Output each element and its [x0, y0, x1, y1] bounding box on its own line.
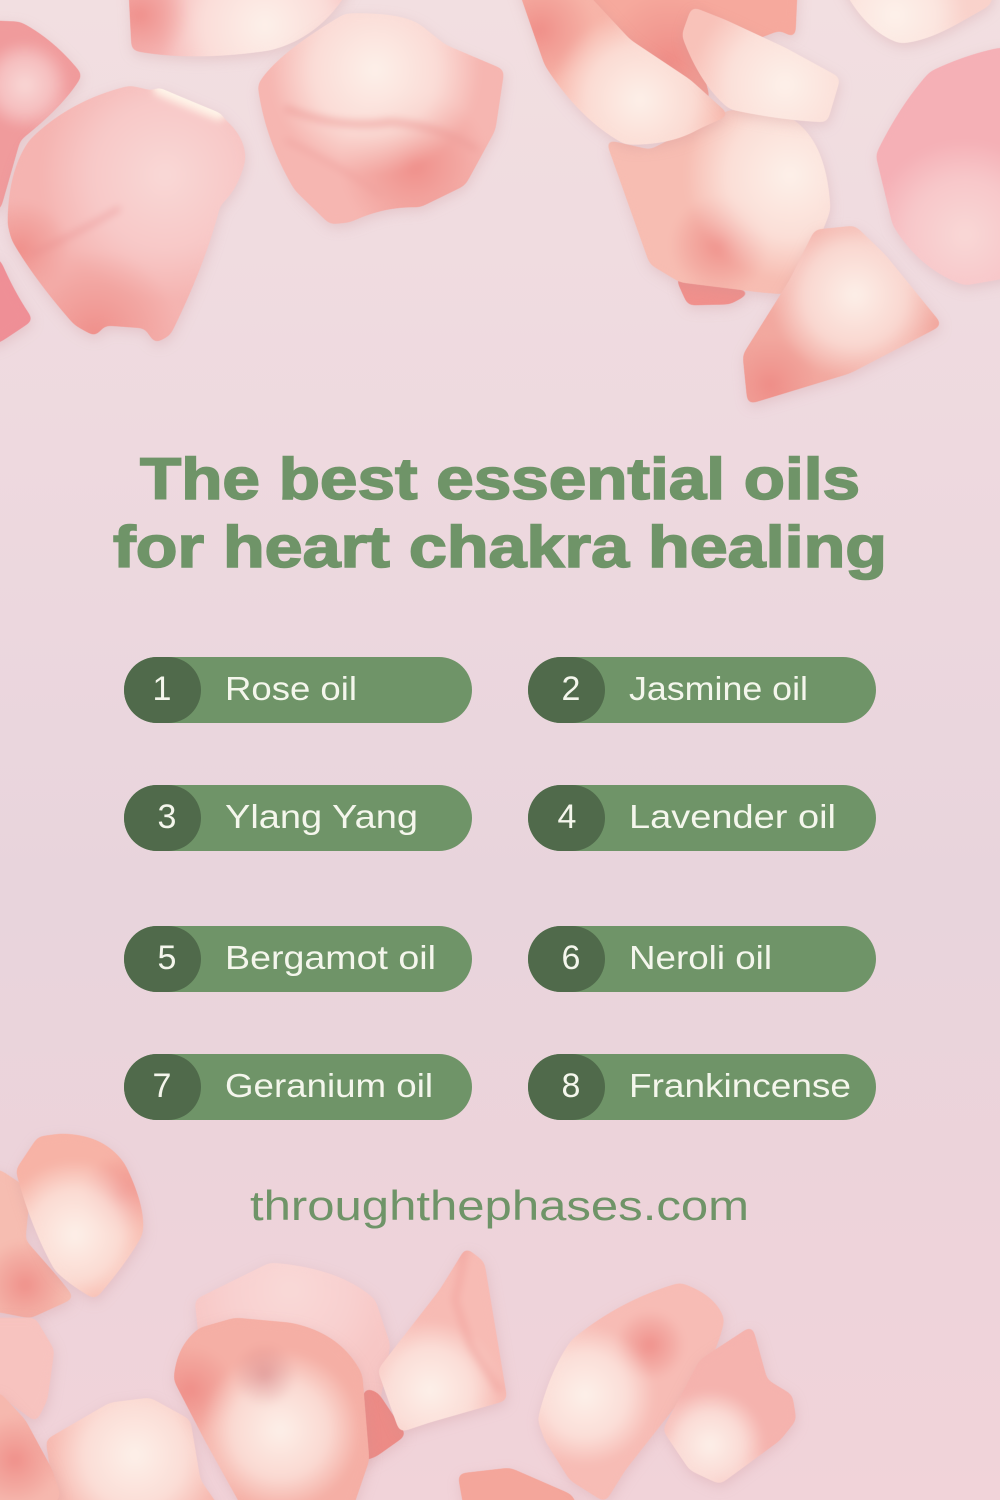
- list item 2: 2: [562, 670, 580, 708]
- petal: left lower salmon: [0, 1393, 60, 1500]
- petal: small under lip: [675, 276, 752, 305]
- petal: right pink: [876, 48, 1000, 285]
- petal: dark back fold: [350, 1388, 406, 1464]
- title: for heart chakra healing: [113, 515, 887, 580]
- list item 3: [124, 785, 472, 851]
- title: The best essential oils: [140, 447, 860, 512]
- bottom-centre petals: [174, 1248, 587, 1500]
- petal: far left lower: [0, 250, 33, 350]
- list item 6: 6: [562, 939, 580, 977]
- petal: pale back: [195, 1263, 390, 1460]
- petal: narrow right: [663, 1326, 796, 1484]
- petal: crumpled left: [0, 1170, 74, 1318]
- list item 4: [528, 785, 876, 851]
- petal: white lower: [46, 1398, 235, 1500]
- petal: main bowl: [174, 1318, 369, 1500]
- list item 7: [124, 1054, 472, 1120]
- petal: small bottom: [458, 1468, 587, 1500]
- list item 3: Ylang Yang: [225, 798, 418, 835]
- list item 1: 1: [153, 670, 171, 708]
- petal: top right cream: [835, 0, 1000, 43]
- bottom-right petals: [538, 1283, 796, 1500]
- petal: heart-shaped centre: [258, 14, 504, 224]
- title: [113, 447, 887, 580]
- list item 1: [124, 657, 472, 723]
- list item 4: Lavender oil: [629, 798, 836, 835]
- top-left petals: [0, 0, 504, 350]
- petal: folded triangle: [378, 1248, 507, 1432]
- petal: far left upper: [0, 20, 82, 210]
- list item 8: [528, 1054, 876, 1120]
- list item 8: 8: [562, 1067, 580, 1105]
- list item 6: [528, 926, 876, 992]
- list item 7: 7: [153, 1067, 171, 1105]
- list item 2: [528, 657, 876, 723]
- list item 5: 5: [158, 939, 176, 977]
- petal: cut wedge: [743, 226, 942, 404]
- list item 5: Bergamot oil: [225, 939, 436, 976]
- list item 7: Geranium oil: [225, 1067, 433, 1104]
- list item 3: 3: [158, 798, 176, 836]
- list item 4: 4: [558, 798, 576, 836]
- list item 2: Jasmine oil: [629, 670, 808, 707]
- footer website: throughthephases.com: [250, 1182, 749, 1229]
- list item 1: Rose oil: [225, 670, 357, 707]
- petal: top centre-left: [128, 0, 358, 56]
- bottom-left petals: [0, 1134, 235, 1500]
- petal: upper light: [682, 7, 840, 122]
- petal: large central: [606, 110, 830, 294]
- petal: left pale: [0, 1318, 54, 1422]
- petal: upper oval: [16, 1134, 143, 1299]
- list item 5: [124, 926, 472, 992]
- list item 8: Frankincense: [629, 1067, 851, 1104]
- petal: salmon back: [555, 0, 798, 100]
- petal: long wedge: [512, 0, 729, 144]
- list item 6: Neroli oil: [629, 939, 772, 976]
- petal: large left: [8, 86, 245, 343]
- petal: large oval: [538, 1283, 724, 1500]
- top-right petals: [512, 0, 1000, 404]
